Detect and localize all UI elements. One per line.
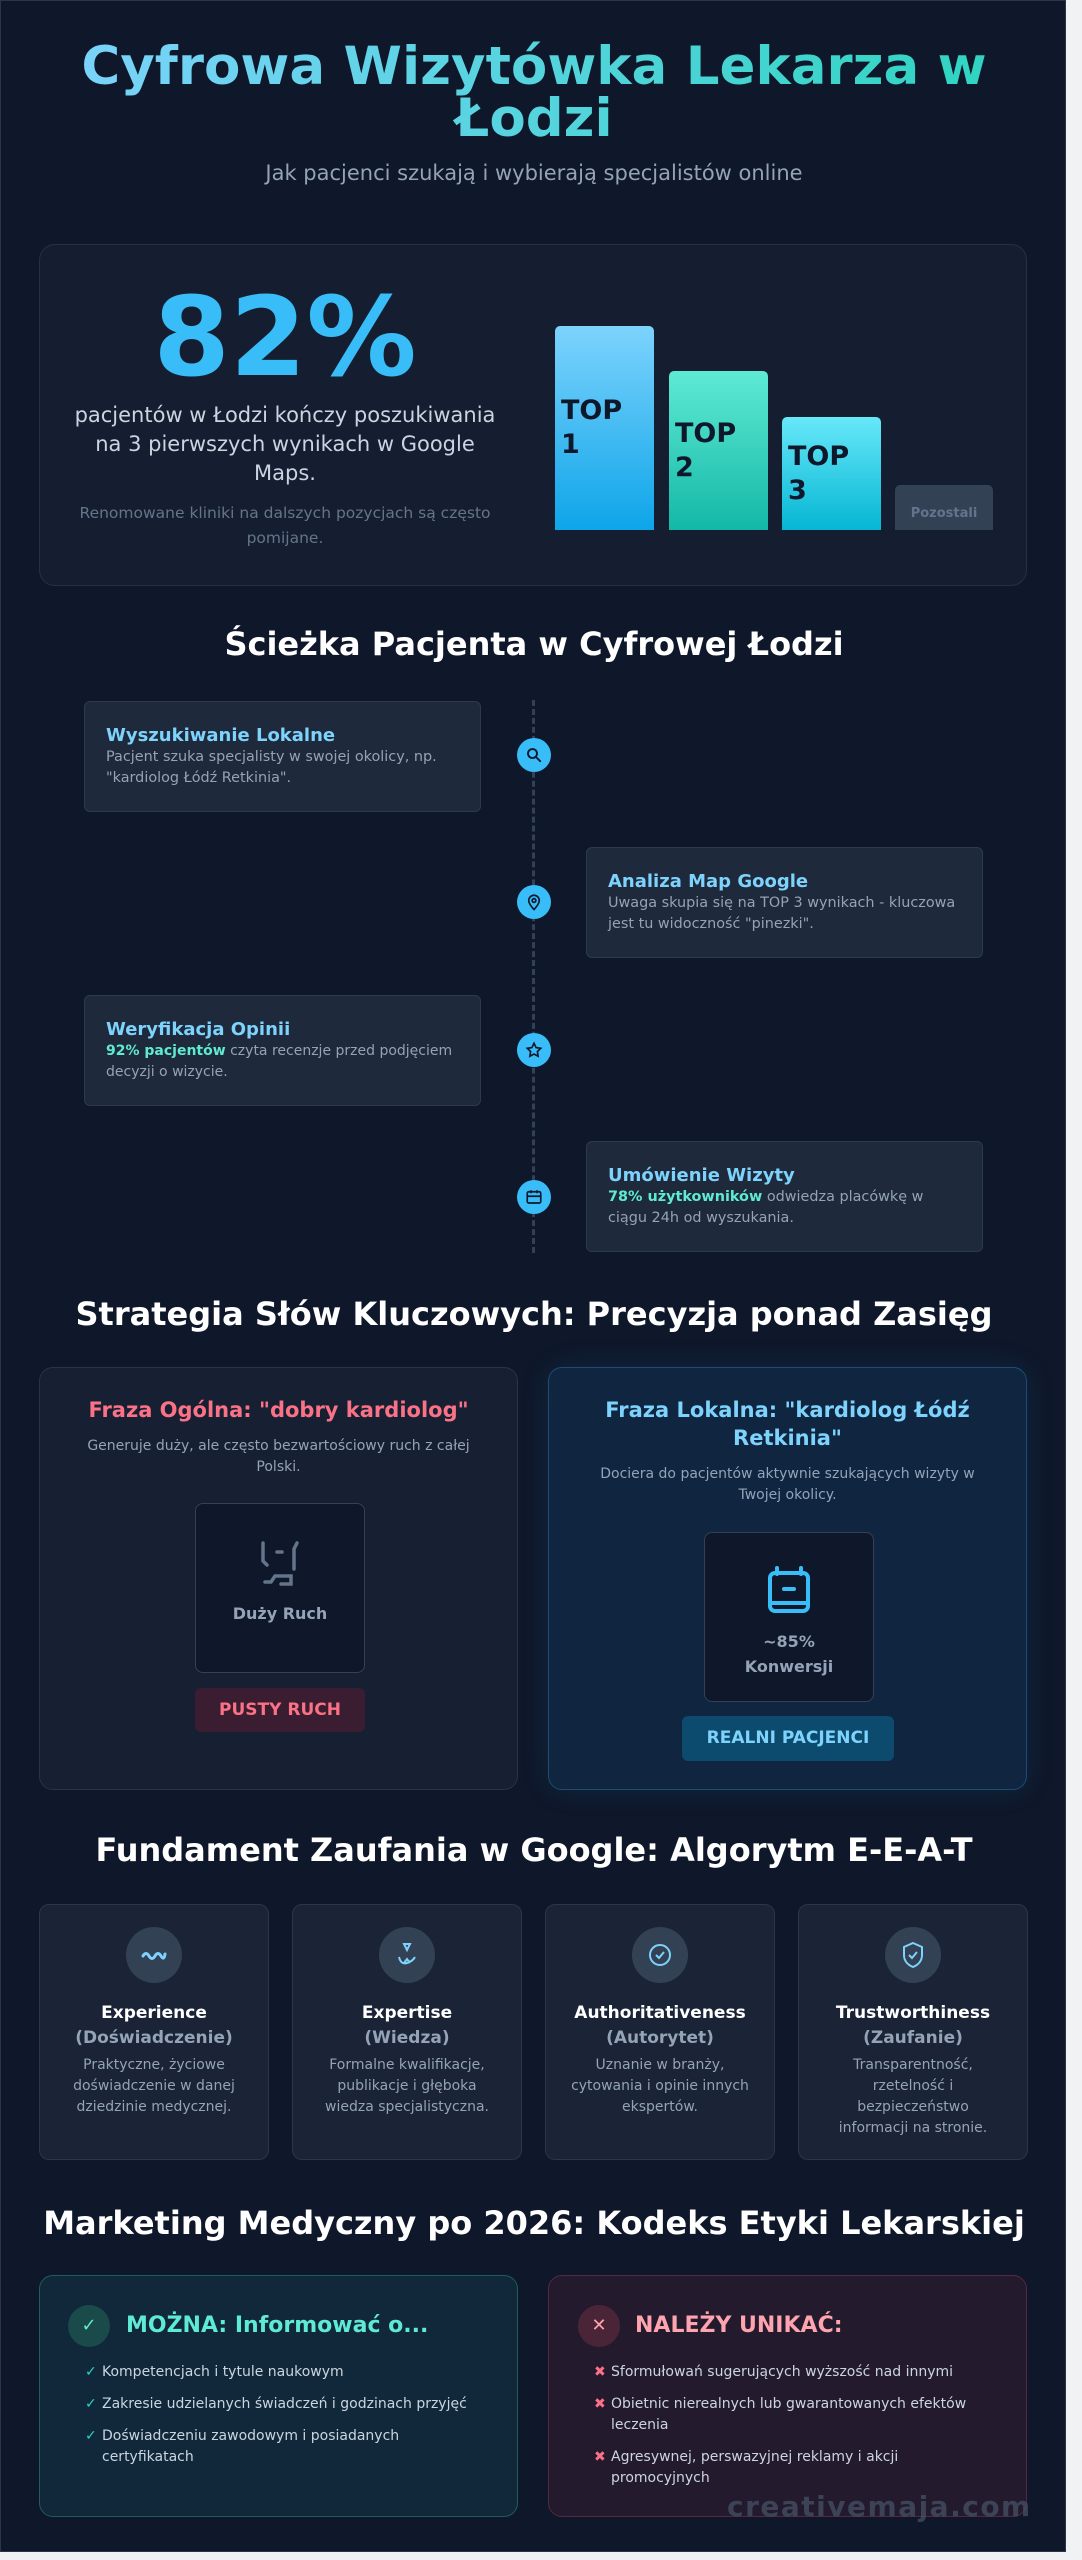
- icon: pin: [517, 885, 551, 919]
- bar chart: TOP: [675, 418, 736, 448]
- step 4 card: 78% użytkowników odwiedza placówkę w ciągu 24h od wyszukania.: [608, 1189, 923, 1226]
- heading: ethics: Marketing Medyczny po 2026: Kodeks Etyki Lekarskiej: [43, 2204, 1025, 2242]
- step 2 card: [586, 847, 983, 958]
- panel: avoid: NALEŻY UNIKAĆ:: [635, 2313, 843, 2338]
- panel: general phrase: Fraza Ogólna: "dobry kardiolog": [88, 1398, 469, 1422]
- box: konwersja: ~85%: [763, 1632, 815, 1651]
- badge: pusty ruch: PUSTY RUCH: [219, 1700, 341, 1720]
- panel: allowed: MOŻNA: Informować o...: [126, 2313, 428, 2338]
- step 4 card: [586, 1141, 983, 1252]
- bar chart: 2: [675, 452, 694, 482]
- box: duzy ruch: [195, 1503, 365, 1673]
- card: authoritativeness: (Autorytet): [606, 2028, 714, 2048]
- step 1 card: Wyszukiwanie Lokalne: [106, 725, 335, 746]
- card: trustworthiness: Transparentność, rzetelność i bezpieczeństwo informacji na stronie.: [839, 2057, 987, 2136]
- card: expertise: Expertise: [362, 2003, 452, 2023]
- box: konwersja: Konwersji: [745, 1657, 833, 1676]
- panel: allowed: [39, 2275, 518, 2517]
- icon: check: ✓: [81, 2315, 97, 2336]
- panel: avoid: Sformułowań sugerujących wyższość nad innymi: [611, 2364, 953, 2380]
- card: trustworthiness: (Zaufanie): [863, 2028, 963, 2048]
- step 2 card: Uwaga skupia się na TOP 3 wynikach - kluczowa jest tu widoczność "pinezki".: [608, 895, 955, 932]
- panel: general phrase: Generuje duży, ale często bezwartościowy ruch z całej Polski.: [87, 1438, 470, 1475]
- icon: check: [68, 2305, 110, 2347]
- icon: cross: ✕: [591, 2315, 607, 2336]
- heading: patient path: Ścieżka Pacjenta w Cyfrowej Łodzi: [224, 625, 844, 663]
- panel: allowed: Kompetencjach i tytule naukowym: [102, 2364, 344, 2380]
- panel: local phrase: Fraza Lokalna: "kardiolog Łódź Retkinia": [605, 1398, 970, 1450]
- panel: avoid: ✖: [594, 2449, 606, 2465]
- step 3 card: [84, 995, 481, 1106]
- step 4 card: Umówienie Wizyty: [608, 1165, 795, 1186]
- panel: avoid: ✖: [594, 2364, 606, 2380]
- bar chart: 3: [788, 474, 807, 506]
- panel: allowed: ✓: [85, 2396, 97, 2412]
- bar chart: 1: [561, 429, 580, 460]
- note: Renomowane kliniki na dalszych pozycjach są często pomijane.: [80, 504, 490, 547]
- step 3 card: 92% pacjentów czyta recenzje przed podjęciem decyzji o wizycie.: [106, 1043, 452, 1080]
- card: experience: Experience: [101, 2003, 207, 2023]
- badge: pusty ruch: [195, 1688, 365, 1732]
- icon: calendar: [517, 1180, 551, 1214]
- panel: allowed: ✓: [85, 2364, 97, 2380]
- bar chart: TOP: [788, 440, 849, 472]
- badge: realni pacjenci: REALNI PACJENCI: [707, 1728, 869, 1748]
- panel: avoid: [548, 2275, 1027, 2517]
- panel: avoid: Agresywnej, perswazyjnej reklamy i akcji promocyjnych: [611, 2449, 898, 2486]
- big number: 82%: [153, 273, 417, 401]
- heading: keywords: Strategia Słów Kluczowych: Precyzja ponad Zasięg: [76, 1295, 992, 1333]
- card: experience: (Doświadczenie): [75, 2028, 233, 2048]
- bar chart: [555, 326, 993, 530]
- panel: allowed: Doświadczeniu zawodowym i posiadanych certyfikatach: [102, 2428, 399, 2465]
- title: Cyfrowa Wizytówka Lekarza w Łodzi: [81, 36, 987, 149]
- bar chart: TOP: [561, 395, 622, 426]
- card: trustworthiness: [798, 1904, 1028, 2160]
- panel: local phrase: Dociera do pacjentów aktywnie szukających wizyty w Twojej okolicy.: [600, 1466, 975, 1503]
- icon: search: [517, 738, 551, 772]
- step 1 card: Pacjent szuka specjalisty w swojej okolicy, np. "kardiolog Łódź Retkinia".: [106, 749, 437, 786]
- heading: EEAT: Fundament Zaufania w Google: Algorytm E-E-A-T: [95, 1831, 973, 1869]
- card: authoritativeness: Authoritativeness: [574, 2003, 746, 2023]
- panel: avoid: Obietnic nierealnych lub gwarantowanych efektów leczenia: [611, 2396, 966, 2433]
- step 3 card: Weryfikacja Opinii: [106, 1019, 290, 1040]
- badge: realni pacjenci: [682, 1716, 894, 1761]
- card: authoritativeness: [545, 1904, 775, 2160]
- timeline: [84, 700, 983, 1253]
- box: konwersja: [704, 1532, 874, 1702]
- icon: cross: [578, 2305, 620, 2347]
- card: expertise: (Wiedza): [364, 2028, 450, 2048]
- panel: local phrase: [548, 1367, 1027, 1790]
- panel: general phrase: [39, 1367, 518, 1790]
- box: duzy ruch: Duży Ruch: [233, 1604, 327, 1623]
- icon: star: [517, 1033, 551, 1067]
- bar chart: Pozostali: [911, 506, 977, 521]
- card: trustworthiness: Trustworthiness: [836, 2003, 990, 2023]
- panel: 82% stat: [39, 244, 1027, 586]
- card: experience: [39, 1904, 269, 2160]
- panel: avoid: ✖: [594, 2396, 606, 2412]
- panel: allowed: ✓: [85, 2428, 97, 2444]
- card: expertise: [292, 1904, 522, 2160]
- subtitle: Jak pacjenci szukają i wybierają specjalistów online: [265, 161, 803, 185]
- stat description: pacjentów w Łodzi kończy poszukiwania na 3 pierwszych wynikach w Google Maps.: [75, 403, 495, 485]
- step 2 card: Analiza Map Google: [608, 871, 808, 892]
- panel: allowed: Zakresie udzielanych świadczeń i godzinach przyjęć: [102, 2396, 467, 2412]
- card: experience: Praktyczne, życiowe doświadczenie w danej dziedzinie medycznej.: [73, 2057, 235, 2115]
- step 1 card: [84, 701, 481, 812]
- card: expertise: Formalne kwalifikacje, publikacje i głęboka wiedza specjalistyczna.: [325, 2057, 489, 2115]
- watermark: creativemaja.com: [727, 2490, 1032, 2523]
- card: authoritativeness: Uznanie w branży, cytowania i opinie innych ekspertów.: [571, 2057, 749, 2115]
